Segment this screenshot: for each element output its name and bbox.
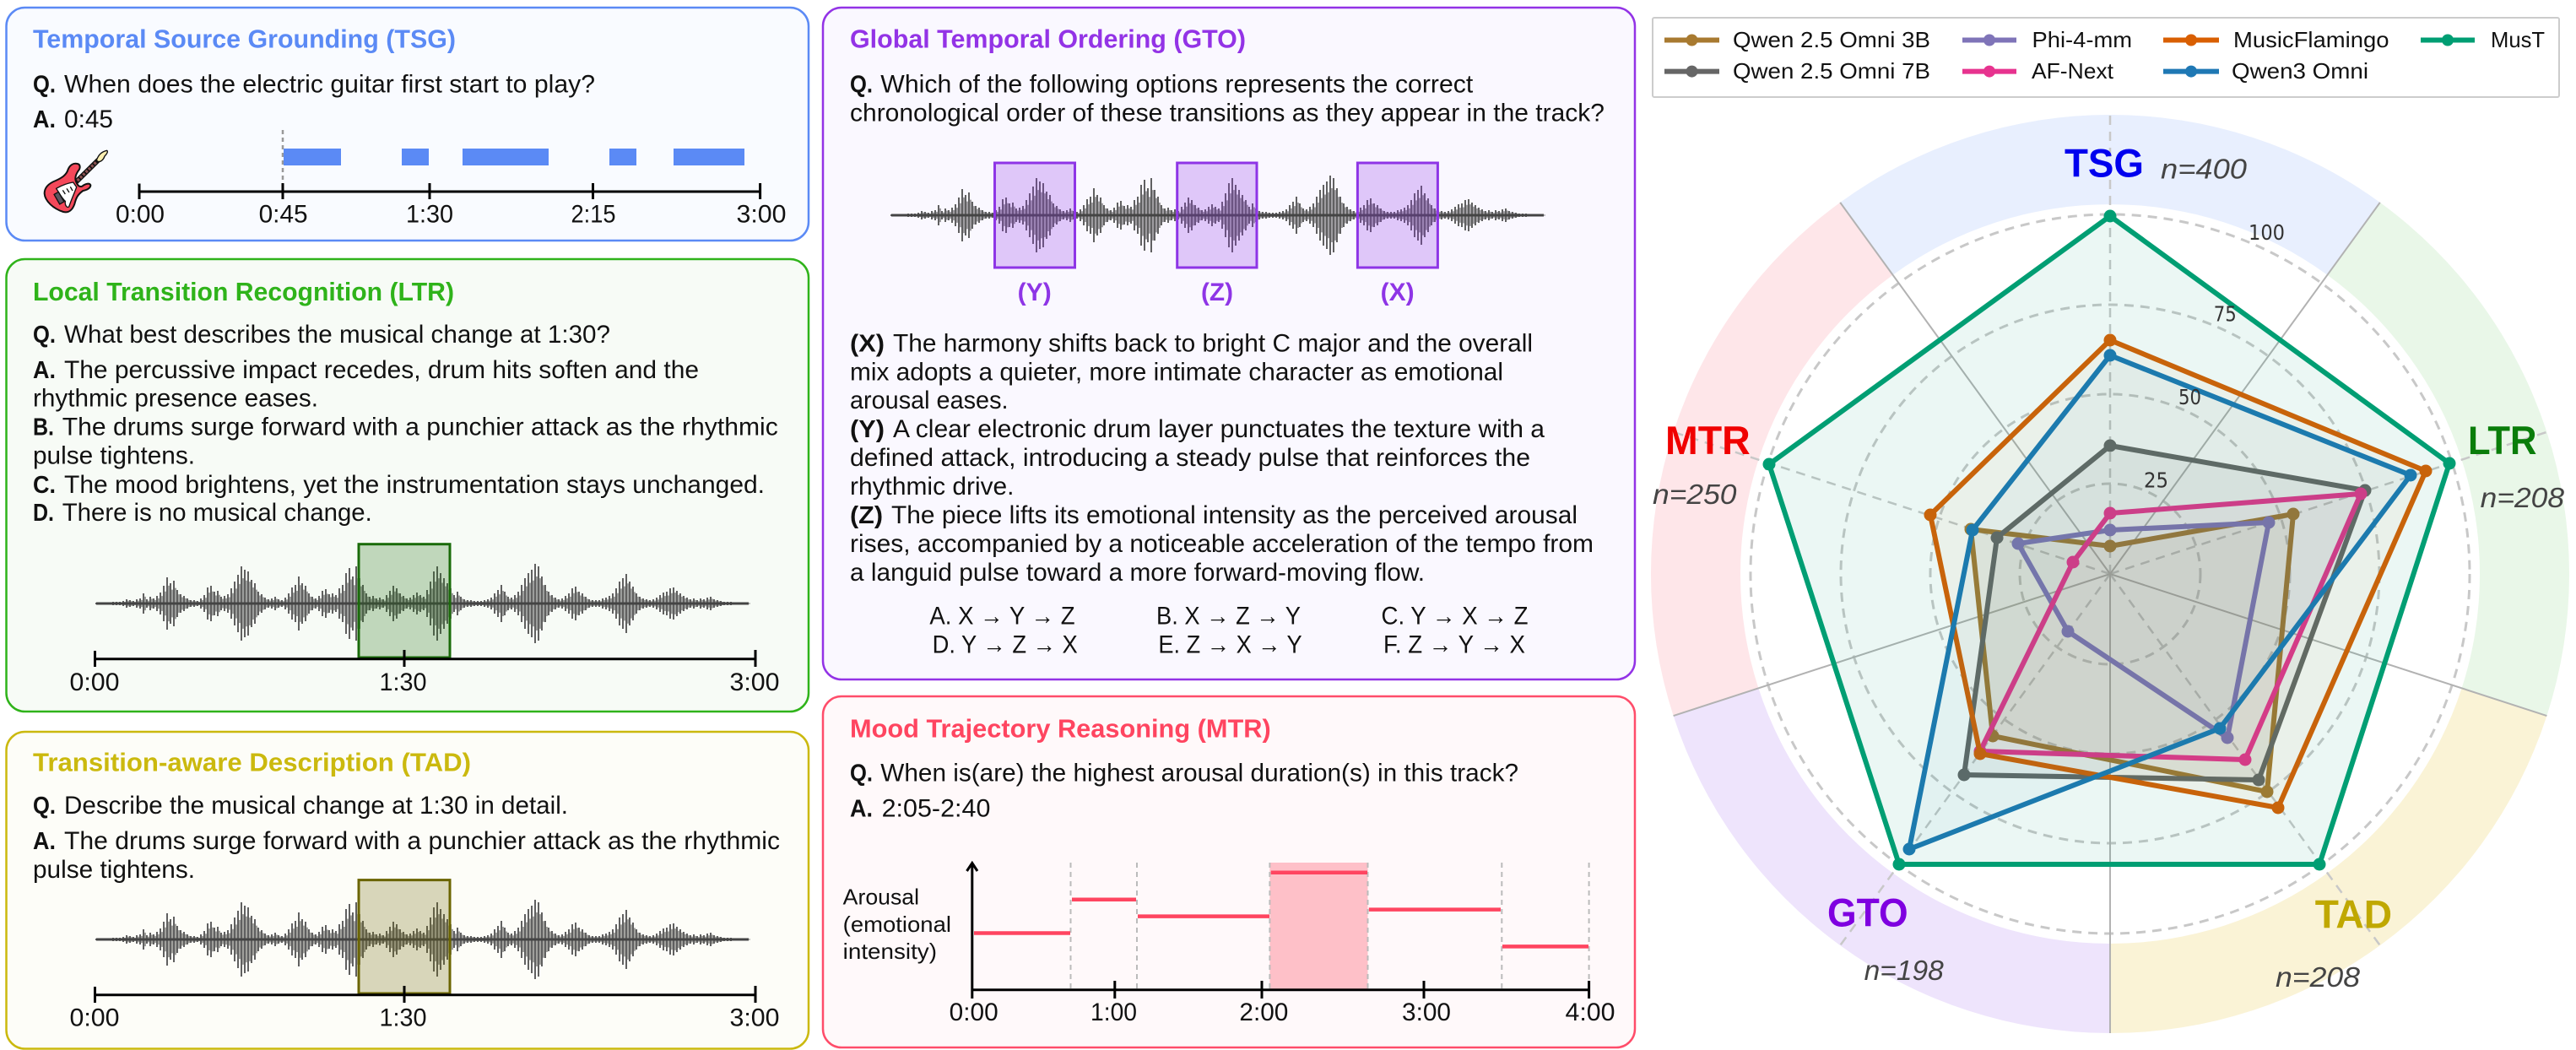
axis label: TSG: n=400: [2161, 154, 2248, 184]
description Z: (Z): [850, 502, 883, 529]
question text: When does the electric guitar first start to play?: [64, 71, 595, 98]
timeline with guitar activity bars: 0:00: [116, 201, 165, 229]
option D: There is no musical change.: [62, 499, 372, 527]
radial tick labels: 100: [2249, 220, 2285, 245]
description Y: [850, 415, 1545, 501]
series: MusicFlamingo: [1924, 334, 2433, 814]
description X: arousal eases.: [850, 387, 1008, 414]
description Y: (Y): [850, 416, 885, 443]
description X: The harmony shifts back to bright C major and the overall: [893, 329, 1533, 357]
category band: TSG: [1840, 115, 2380, 275]
arousal step chart: 3:00: [1402, 999, 1451, 1026]
description X: [850, 329, 1533, 414]
question text: Describe the musical change at 1:30 in detail.: [64, 792, 568, 820]
panel: Transition-aware Description: [7, 732, 809, 1048]
option A: The percussive impact recedes, drum hits soften and the: [64, 356, 699, 384]
radial tick labels: 50: [2178, 385, 2201, 409]
waveform with highlighted transition: 1:30: [380, 1004, 427, 1032]
legend item: Qwen 2.5 Omni 7B: [1664, 58, 1930, 84]
answer options: C. Y → X → Z: [1381, 602, 1528, 630]
legend item: Phi-4-mm: [1962, 27, 2132, 52]
axis label: TAD: n=208: [2276, 961, 2361, 993]
category band: MTR: [1651, 203, 1893, 716]
waveform with highlighted transition: 0:00: [69, 668, 120, 696]
option A: A.: [33, 357, 56, 384]
legend item: Qwen 2.5 Omni 3B: Qwen 2.5 Omni 3B: [1733, 27, 1930, 52]
axis label: TAD: TAD: [2315, 891, 2392, 937]
icon: electric guitar: [45, 150, 107, 212]
question text: Q.: [33, 793, 56, 820]
series: Qwen 2.5 Omni 3B: [1965, 508, 2299, 798]
waveform with three highlighted segments: (Z): [1201, 279, 1233, 306]
question text: Q.: [850, 760, 873, 788]
option C: C.: [33, 472, 56, 499]
legend item: MusT: MusT: [2491, 27, 2545, 52]
option B: The drums surge forward with a punchier attack as the rhythmic: [62, 414, 778, 441]
axis label: MTR: [1653, 418, 1751, 510]
series: MusT: [1762, 209, 2456, 871]
answer text: [33, 106, 113, 133]
answer text: 0:45: [64, 106, 113, 133]
waveform with three highlighted segments: [891, 163, 1545, 306]
legend item: Qwen 2.5 Omni 3B: [1664, 27, 1930, 52]
legend: [1653, 18, 2559, 97]
category band: GTO: [1674, 688, 2110, 1033]
description Z: rises, accompanied by a noticeable acceleration of the tempo from: [850, 530, 1594, 558]
description Y: A clear electronic drum layer punctuates the texture with a: [893, 415, 1545, 443]
answer text: A.: [33, 828, 56, 855]
waveform with highlighted transition: 1:30: [380, 668, 427, 696]
question text: chronological order of these transitions as they appear in the track?: [850, 100, 1605, 127]
option B: B.: [33, 414, 54, 441]
legend item: Qwen3 Omni: [2163, 58, 2368, 84]
timeline with guitar activity bars: 3:00: [736, 201, 787, 229]
arousal step chart: 2:00: [1239, 999, 1288, 1026]
answer text: A.: [850, 795, 873, 822]
series: AF-Next: [1973, 488, 2367, 766]
arousal step chart: [843, 863, 1615, 1026]
description Z: a languid pulse toward a more forward-moving flow.: [850, 559, 1425, 587]
question text: Q.: [33, 322, 56, 349]
panel: Mood Trajectory Reasoning: [823, 696, 1635, 1047]
axis label: LTR: [2468, 418, 2565, 513]
waveform with highlighted transition: 3:00: [729, 668, 780, 696]
option A: rhythmic presence eases.: [33, 385, 318, 413]
question text: Which of the following options represents the correct: [880, 71, 1473, 98]
timeline with guitar activity bars: [116, 130, 787, 229]
heading: LTR: Local Transition Recognition (LTR): [33, 277, 454, 306]
timeline with guitar activity bars: 2:15: [571, 201, 616, 229]
panel: Global Temporal Ordering: [823, 8, 1635, 679]
waveform with highlighted transition: 3:00: [729, 1004, 780, 1032]
radial tick labels: 25: [2144, 468, 2168, 493]
answer options: [929, 602, 1528, 659]
waveform with three highlighted segments: (Y): [1018, 279, 1052, 306]
axis label: LTR: LTR: [2468, 418, 2537, 463]
legend item: Qwen 2.5 Omni 7B: Qwen 2.5 Omni 7B: [1733, 58, 1930, 84]
axis label: MTR: MTR: [1665, 418, 1751, 463]
panel: Local Transition Recognition: [7, 259, 809, 712]
series: Qwen 2.5 Omni 7B: [1958, 439, 2372, 787]
axis label: TSG: TSG: [2065, 141, 2144, 186]
legend item: MusicFlamingo: MusicFlamingo: [2233, 27, 2389, 52]
category band: LTR: [2327, 203, 2569, 716]
answer text: [33, 827, 780, 884]
question text: When is(are) the highest arousal duration(s) in this track?: [880, 760, 1518, 788]
option D: D.: [33, 500, 54, 527]
description Z: [850, 501, 1594, 587]
series: Qwen3 Omni: [1902, 349, 2417, 856]
axis label: GTO: n=198: [1864, 955, 1944, 986]
heading: TSG: Temporal Source Grounding (TSG): [33, 24, 456, 54]
legend item: MusicFlamingo: [2163, 27, 2389, 52]
radial tick labels: [2144, 220, 2285, 493]
waveform with highlighted transition: [69, 544, 780, 696]
heading: MTR: Mood Trajectory Reasoning (MTR): [850, 714, 1271, 743]
question text: [850, 71, 1605, 127]
description Y: rhythmic drive.: [850, 473, 1015, 501]
waveform with highlighted transition: [69, 880, 780, 1032]
timeline with guitar activity bars: 1:30: [406, 201, 453, 229]
timeline with guitar activity bars: 0:45: [259, 201, 308, 229]
answer text: pulse tightens.: [33, 856, 195, 884]
description X: (X): [850, 330, 885, 357]
option A: [33, 356, 699, 413]
option B: [33, 414, 778, 470]
answer text: A.: [33, 106, 56, 133]
answer options: B. X → Z → Y: [1156, 602, 1301, 630]
legend item: Qwen3 Omni: Qwen3 Omni: [2232, 58, 2368, 84]
answer options: D. Y → Z → X: [933, 631, 1078, 659]
legend item: AF-Next: [1962, 58, 2114, 84]
axis label: LTR: n=208: [2481, 482, 2565, 513]
arousal step chart: 0:00: [950, 999, 998, 1026]
option B: pulse tightens.: [33, 442, 195, 470]
axis label: TAD: [2276, 891, 2392, 993]
question text: What best describes the musical change at 1:30?: [64, 321, 610, 349]
arousal step chart: 1:00: [1090, 999, 1137, 1026]
arousal step chart: 4:00: [1565, 999, 1615, 1026]
answer options: F. Z → Y → X: [1383, 631, 1525, 659]
waveform with highlighted transition: 0:00: [69, 1004, 120, 1032]
axis label: GTO: GTO: [1827, 890, 1908, 935]
arousal step chart: (emotional: [843, 912, 951, 937]
axis label: GTO: [1827, 890, 1944, 986]
arousal step chart: intensity): [843, 939, 937, 964]
series: Phi-4-mm: [2012, 517, 2276, 744]
heading: GTO: Global Temporal Ordering (GTO): [850, 24, 1246, 54]
heading: TAD: Transition-aware Description (TAD): [33, 748, 471, 777]
category band: TAD: [2110, 688, 2546, 1033]
description X: mix adopts a quieter, more intimate character as emotional: [850, 358, 1503, 386]
radial tick labels: 75: [2214, 302, 2237, 327]
question text: Q.: [33, 71, 56, 98]
axis label: TSG: [2065, 141, 2248, 186]
answer text: 2:05-2:40: [882, 794, 990, 822]
description Z: The piece lifts its emotional intensity as the perceived arousal: [891, 501, 1578, 529]
axis label: MTR: n=250: [1653, 479, 1737, 510]
description Y: defined attack, introducing a steady pulse that reinforces the: [850, 444, 1530, 472]
answer text: The drums surge forward with a punchier attack as the rhythmic: [64, 827, 780, 855]
legend item: Phi-4-mm: Phi-4-mm: [2032, 27, 2132, 52]
waveform with three highlighted segments: (X): [1381, 279, 1415, 306]
option C: The mood brightens, yet the instrumentation stays unchanged.: [64, 471, 765, 499]
radar chart: [1651, 115, 2569, 1033]
answer options: A. X → Y → Z: [929, 602, 1075, 630]
arousal step chart: Arousal: [843, 885, 919, 910]
answer options: E. Z → X → Y: [1158, 631, 1302, 659]
legend item: AF-Next: AF-Next: [2032, 58, 2114, 84]
legend item: MusT: [2421, 27, 2545, 52]
panel: Temporal Source Grounding: [7, 8, 809, 241]
question text: Q.: [850, 71, 873, 98]
